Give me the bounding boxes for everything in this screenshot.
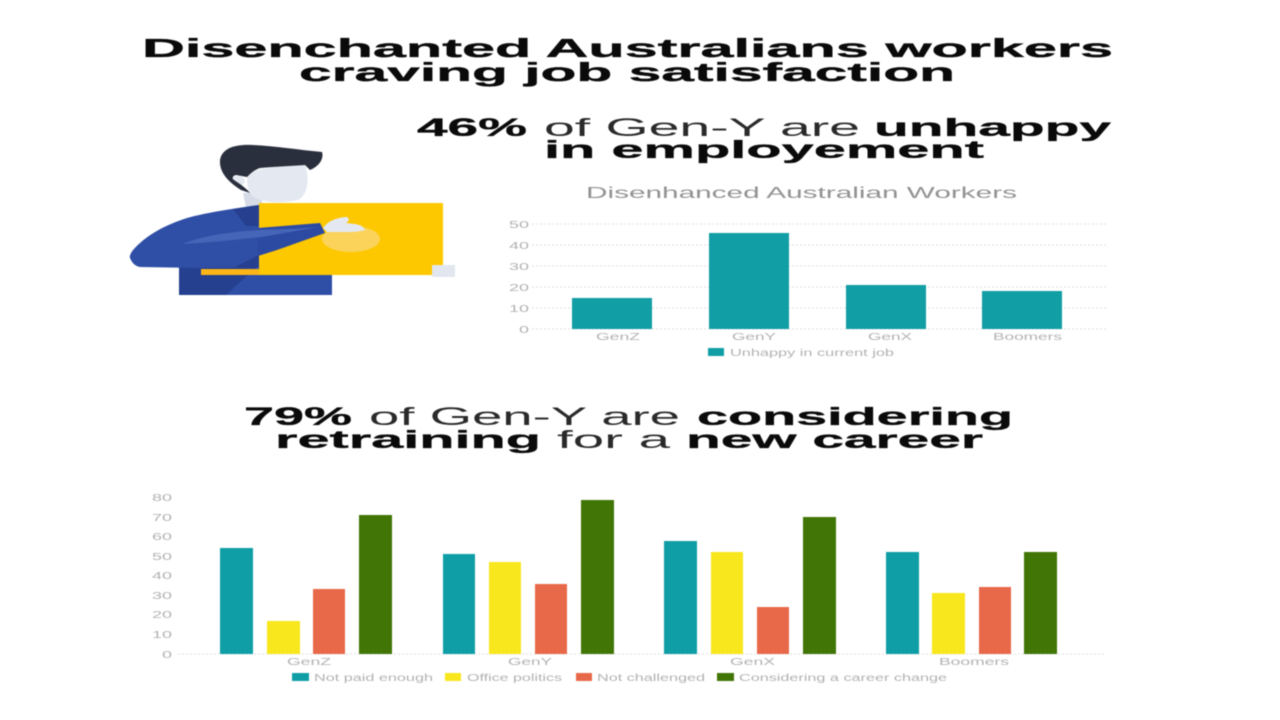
legend: Not challenged [597, 673, 705, 684]
legend: Considering a career change [739, 673, 948, 684]
heading: 79% of Gen-Y retraining: new career [686, 426, 984, 454]
face [247, 165, 308, 202]
x axis labels: GenX [868, 332, 913, 343]
x axis labels: GenX [730, 657, 776, 668]
heading: 79% of Gen-Y retraining: considering [697, 403, 1013, 431]
bars: office politics [267, 552, 965, 654]
y axis labels: 20 [152, 610, 173, 621]
y axis labels: 50 [509, 220, 530, 231]
x axis labels [596, 332, 1062, 343]
heading: 79% of Gen-Y retraining [244, 403, 1013, 454]
heading: 79% of Gen-Y retraining: retraining [275, 426, 541, 454]
legend: Not paid enough [314, 673, 433, 684]
chart: reasons by generation [152, 493, 1105, 684]
x axis labels: GenZ [596, 332, 640, 343]
x axis labels: Boomers [939, 657, 1009, 668]
forearm [258, 223, 325, 256]
ear [231, 176, 245, 186]
illustration: man pointing at yellow board [130, 145, 455, 295]
hair [220, 145, 322, 193]
heading: 79% of Gen-Y retraining: of Gen-Y are [369, 403, 680, 431]
y axis labels: 0 [519, 325, 530, 336]
highlight circle [322, 226, 380, 252]
y axis labels: 10 [152, 630, 173, 641]
y axis labels: 70 [152, 513, 173, 524]
legend [708, 348, 895, 359]
y axis labels [509, 220, 530, 336]
neck [243, 193, 262, 208]
title: craving job satisfaction [299, 57, 955, 87]
heading: 46% of Gen-Y unhappy: 46% [417, 114, 527, 142]
title [142, 33, 1113, 87]
orange strip [201, 269, 259, 275]
y axis labels [152, 493, 173, 661]
bars [572, 233, 1062, 329]
hand [323, 217, 365, 232]
chart: Disenhanced Australian Workers [509, 185, 1108, 359]
y axis labels: 10 [509, 304, 530, 315]
heading: 46% of Gen-Y unhappy: in employement [544, 136, 986, 164]
sleeve [130, 205, 259, 268]
heading: 46% of Gen-Y unhappy: of Gen-Y are [544, 114, 860, 142]
y axis labels: 20 [509, 283, 530, 294]
y axis labels: 80 [152, 493, 173, 504]
y axis labels: 50 [152, 552, 173, 563]
y axis labels: 0 [162, 650, 173, 661]
legend: Unhappy in current job [730, 348, 895, 359]
x axis labels: GenY [732, 332, 777, 343]
legend: Office politics [467, 673, 562, 684]
x axis labels: GenY [508, 657, 553, 668]
legend [292, 673, 948, 684]
y axis labels: 30 [509, 262, 530, 273]
heading: 46% of Gen-Y unhappy: unhappy [874, 114, 1111, 142]
chart title: Disenhanced Australian Workers [586, 185, 1017, 202]
bars: considering a career change [359, 500, 1057, 654]
x axis labels: GenZ [287, 657, 331, 668]
x axis labels: Boomers [993, 332, 1062, 343]
bars: not paid enough [220, 541, 919, 654]
y axis labels: 40 [509, 241, 530, 252]
y axis labels: 30 [152, 591, 173, 602]
y axis labels: 60 [152, 532, 173, 543]
bars: not challenged [313, 584, 1011, 654]
heading: 79% of Gen-Y retraining: for a [557, 426, 670, 454]
heading: 79% of Gen-Y retraining: 79% [244, 403, 352, 431]
yellow board [259, 203, 443, 275]
x axis labels [287, 657, 1009, 668]
heading: 46% of Gen-Y unhappy [417, 114, 1111, 164]
torso [179, 262, 332, 295]
corner square [432, 265, 455, 277]
y axis labels: 40 [152, 571, 173, 582]
title: Disenchanted Australians workers [142, 33, 1113, 63]
